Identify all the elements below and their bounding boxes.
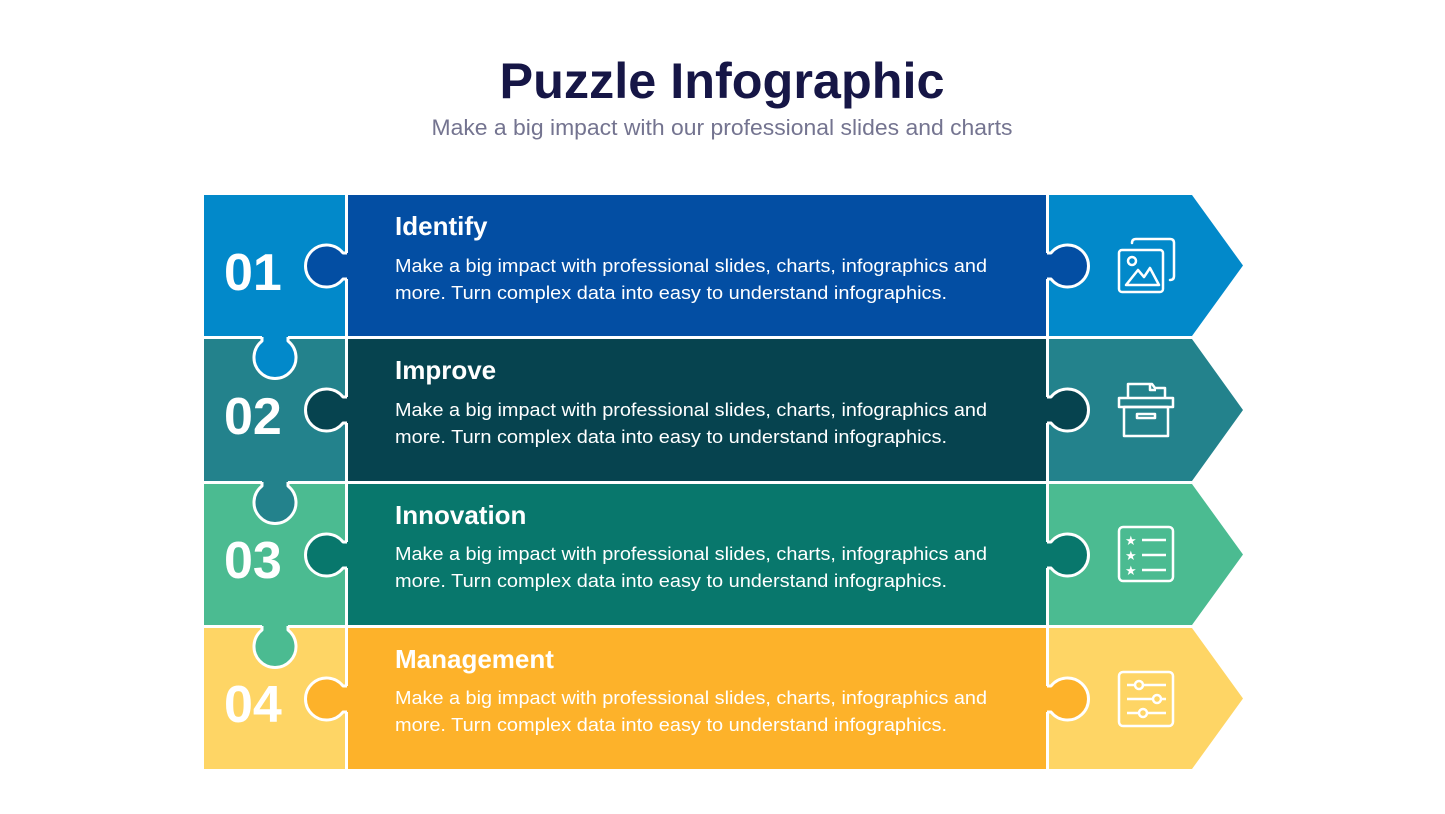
row 1: Identify: Make a big impact with professional slides, charts, infographics and: [395, 256, 987, 276]
icon: star list: ★: [1125, 563, 1137, 578]
row 3: Innovation: Innovation: [395, 500, 526, 530]
row 3: Innovation: [204, 484, 1243, 625]
row 3: Innovation: 03: [224, 532, 282, 590]
row 4: Management: 04: [224, 676, 282, 734]
row 4: Management: [204, 628, 1243, 769]
icon: archive box: [1119, 384, 1173, 436]
row 2: Improve: Improve: [395, 355, 496, 385]
row 2: Improve: more. Turn complex data into easy to understand infographics.: [395, 427, 947, 447]
row 1: Identify: [204, 195, 1243, 336]
icon: star list: ★: [1125, 533, 1137, 548]
icon: images: [1119, 239, 1174, 292]
icon: star list: ★: [1125, 548, 1137, 563]
row 2: Improve: Make a big impact with professional slides, charts, infographics and: [395, 400, 987, 420]
row 3: Innovation: Make a big impact with professional slides, charts, infographics and: [395, 544, 987, 564]
row 4: Management: Make a big impact with professional slides, charts, infographics and: [395, 688, 987, 708]
icon: star list: [1119, 527, 1173, 581]
row 2: Improve: 02: [224, 388, 282, 446]
row 2: Improve: [204, 339, 1243, 481]
row 1: Identify: Identify: [395, 211, 488, 241]
row 1: Identify: 01: [224, 244, 282, 302]
puzzle knobs: [254, 245, 1088, 720]
icon: sliders: [1119, 672, 1173, 726]
row 1: Identify: more. Turn complex data into easy to understand infographics.: [395, 283, 947, 303]
subtitle: Make a big impact with our professional slides and charts: [432, 115, 1012, 140]
row 4: Management: more. Turn complex data into easy to understand infographics.: [395, 715, 947, 735]
row 3: Innovation: more. Turn complex data into easy to understand infographics.: [395, 571, 947, 591]
title: Puzzle Infographic: [500, 53, 944, 109]
row 4: Management: Management: [395, 644, 554, 674]
